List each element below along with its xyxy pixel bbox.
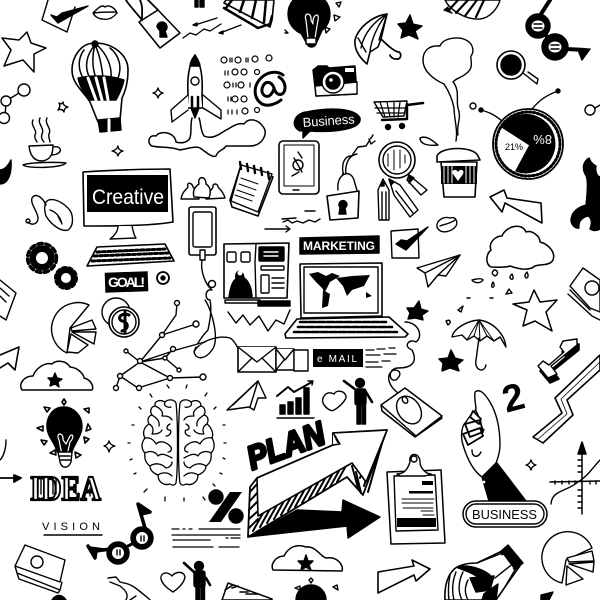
icon: number one 3D <box>538 339 579 383</box>
label: vision: VISION <box>42 521 100 533</box>
label: marketing banner: MARKETING <box>303 239 375 253</box>
icon: checkbox top left <box>42 0 88 32</box>
icon: black shape bottom <box>541 592 553 600</box>
speech bubble: business <box>294 109 360 138</box>
chart: axes with curve <box>550 442 600 514</box>
icon: keyboard <box>87 244 174 266</box>
icon: black bar stub <box>195 0 204 7</box>
label: e mail <box>313 348 396 367</box>
icon: brain <box>128 385 226 501</box>
icon: percent sign <box>209 490 243 523</box>
icon: clipboard <box>387 454 445 544</box>
icon: camera <box>313 66 357 96</box>
icon: outline arrow right <box>378 560 430 593</box>
chart: rising bars <box>277 381 314 418</box>
icon: tablet with dollar <box>279 141 319 194</box>
icon: padlock with key <box>327 135 375 220</box>
icon: balloon bottom right <box>445 545 523 600</box>
icon: zigzag arrow right <box>533 355 600 443</box>
icon: black star top <box>398 15 422 39</box>
icon: paper plane <box>417 255 460 287</box>
icon: sparkle idea <box>104 441 115 452</box>
icon: coins <box>102 298 139 337</box>
icon: black star lower <box>439 350 463 371</box>
icon: small arrow left edge <box>0 475 21 482</box>
icon: light bulb bottom <box>295 578 338 600</box>
icon: pencils <box>378 179 418 220</box>
icon: black arrow <box>248 500 380 538</box>
icon: heart lower <box>161 572 185 592</box>
icon: creative computer monitor: Creative <box>92 186 164 209</box>
icon: money stack right edge <box>568 268 600 320</box>
icon: smartphone and cable <box>189 207 238 358</box>
icon: envelopes <box>238 347 308 372</box>
icon: umbrella <box>452 320 506 370</box>
icon: cloud with star <box>21 361 93 390</box>
icon: mouse on pad with cable <box>381 322 442 437</box>
icon: sparkles <box>58 88 163 156</box>
icon: notepad bottom <box>222 583 272 600</box>
icon: ticket with arrows <box>183 0 274 38</box>
icon: wrench <box>571 158 600 231</box>
label: idea: IDEA <box>30 469 102 508</box>
icon: idea light bulb <box>37 399 91 467</box>
icon: hot air balloon <box>72 41 128 132</box>
icon: large hatched arrow <box>248 430 387 537</box>
icon: light bulb top <box>285 0 341 47</box>
text lines <box>172 529 240 547</box>
icon: at sign <box>255 72 285 105</box>
chart: percent gauge <box>479 89 600 179</box>
icon: umbrella top <box>355 14 401 64</box>
icon: bottom-edge stub <box>52 596 66 600</box>
icon: paper arrow left edge <box>0 347 19 370</box>
icon: lips top <box>93 6 117 19</box>
arrows and squiggle <box>265 211 320 232</box>
icon: heart <box>323 391 346 411</box>
zigzag chart line under panel <box>225 300 300 335</box>
icon: molecule left <box>0 84 30 124</box>
chart: pie left <box>52 303 96 353</box>
panel: website layout <box>224 243 289 298</box>
number two: 2 <box>498 376 529 422</box>
icon: lips right <box>437 217 457 232</box>
icon: star outline right <box>513 290 557 331</box>
icon: notepad <box>230 162 273 216</box>
icon: round lens <box>470 51 538 109</box>
icon: person pointing lower <box>184 562 210 600</box>
icon: black star <box>407 301 428 320</box>
icon: group of people <box>181 178 225 199</box>
icon: pointing hand with sleeve <box>462 391 526 501</box>
label: plan: PLAN <box>242 414 331 477</box>
icon: coffee to go with smoke <box>420 38 480 197</box>
icon: money stack <box>15 545 65 593</box>
icon: magnifying glass <box>379 142 427 195</box>
icon: money fragment left edge <box>0 280 16 320</box>
icon: rocket with smoke cloud <box>149 55 265 156</box>
icon: black crescent left edge <box>0 160 11 184</box>
icon: balloon fragment top <box>444 0 500 19</box>
label: e mail: e MAIL <box>317 354 357 365</box>
icon: coffee cup and steam <box>23 118 66 167</box>
icon: cloud star lower <box>272 546 342 571</box>
icon: computer mouse left <box>26 196 72 230</box>
icon: shopping cart <box>374 101 423 130</box>
icon: goal label <box>105 271 169 293</box>
icon: curve left edge <box>0 440 6 460</box>
icon: star outline <box>2 32 46 72</box>
icon: glasses lower <box>88 504 153 564</box>
icon: padlock top <box>126 0 180 48</box>
icon: black side blob <box>295 115 300 131</box>
icon: laptop with world map <box>285 263 408 338</box>
chart: pie right <box>542 532 594 585</box>
icon: outline arrow pointing left <box>490 190 542 223</box>
chart: percent gauge: 21% <box>505 142 523 152</box>
icon: key <box>108 577 150 600</box>
badge: business <box>463 501 547 527</box>
icon: glasses top right <box>526 0 590 60</box>
icon: paper plane center <box>227 381 266 410</box>
icon: binary digits <box>221 55 272 114</box>
icon: creative computer monitor <box>83 169 173 239</box>
icon: person pointing <box>344 378 372 424</box>
icon: rain cloud <box>446 226 554 325</box>
icon: checkbox <box>391 227 428 258</box>
icon: goal label: GOAL! <box>108 274 145 290</box>
chart: percent gauge: 8% <box>533 132 552 147</box>
speech bubble: business: Business <box>302 111 356 130</box>
badge: business: BUSINESS <box>472 507 537 522</box>
icon: sparkle right <box>526 460 536 470</box>
icon: gears <box>28 244 76 288</box>
chart: network nodes <box>114 300 206 390</box>
